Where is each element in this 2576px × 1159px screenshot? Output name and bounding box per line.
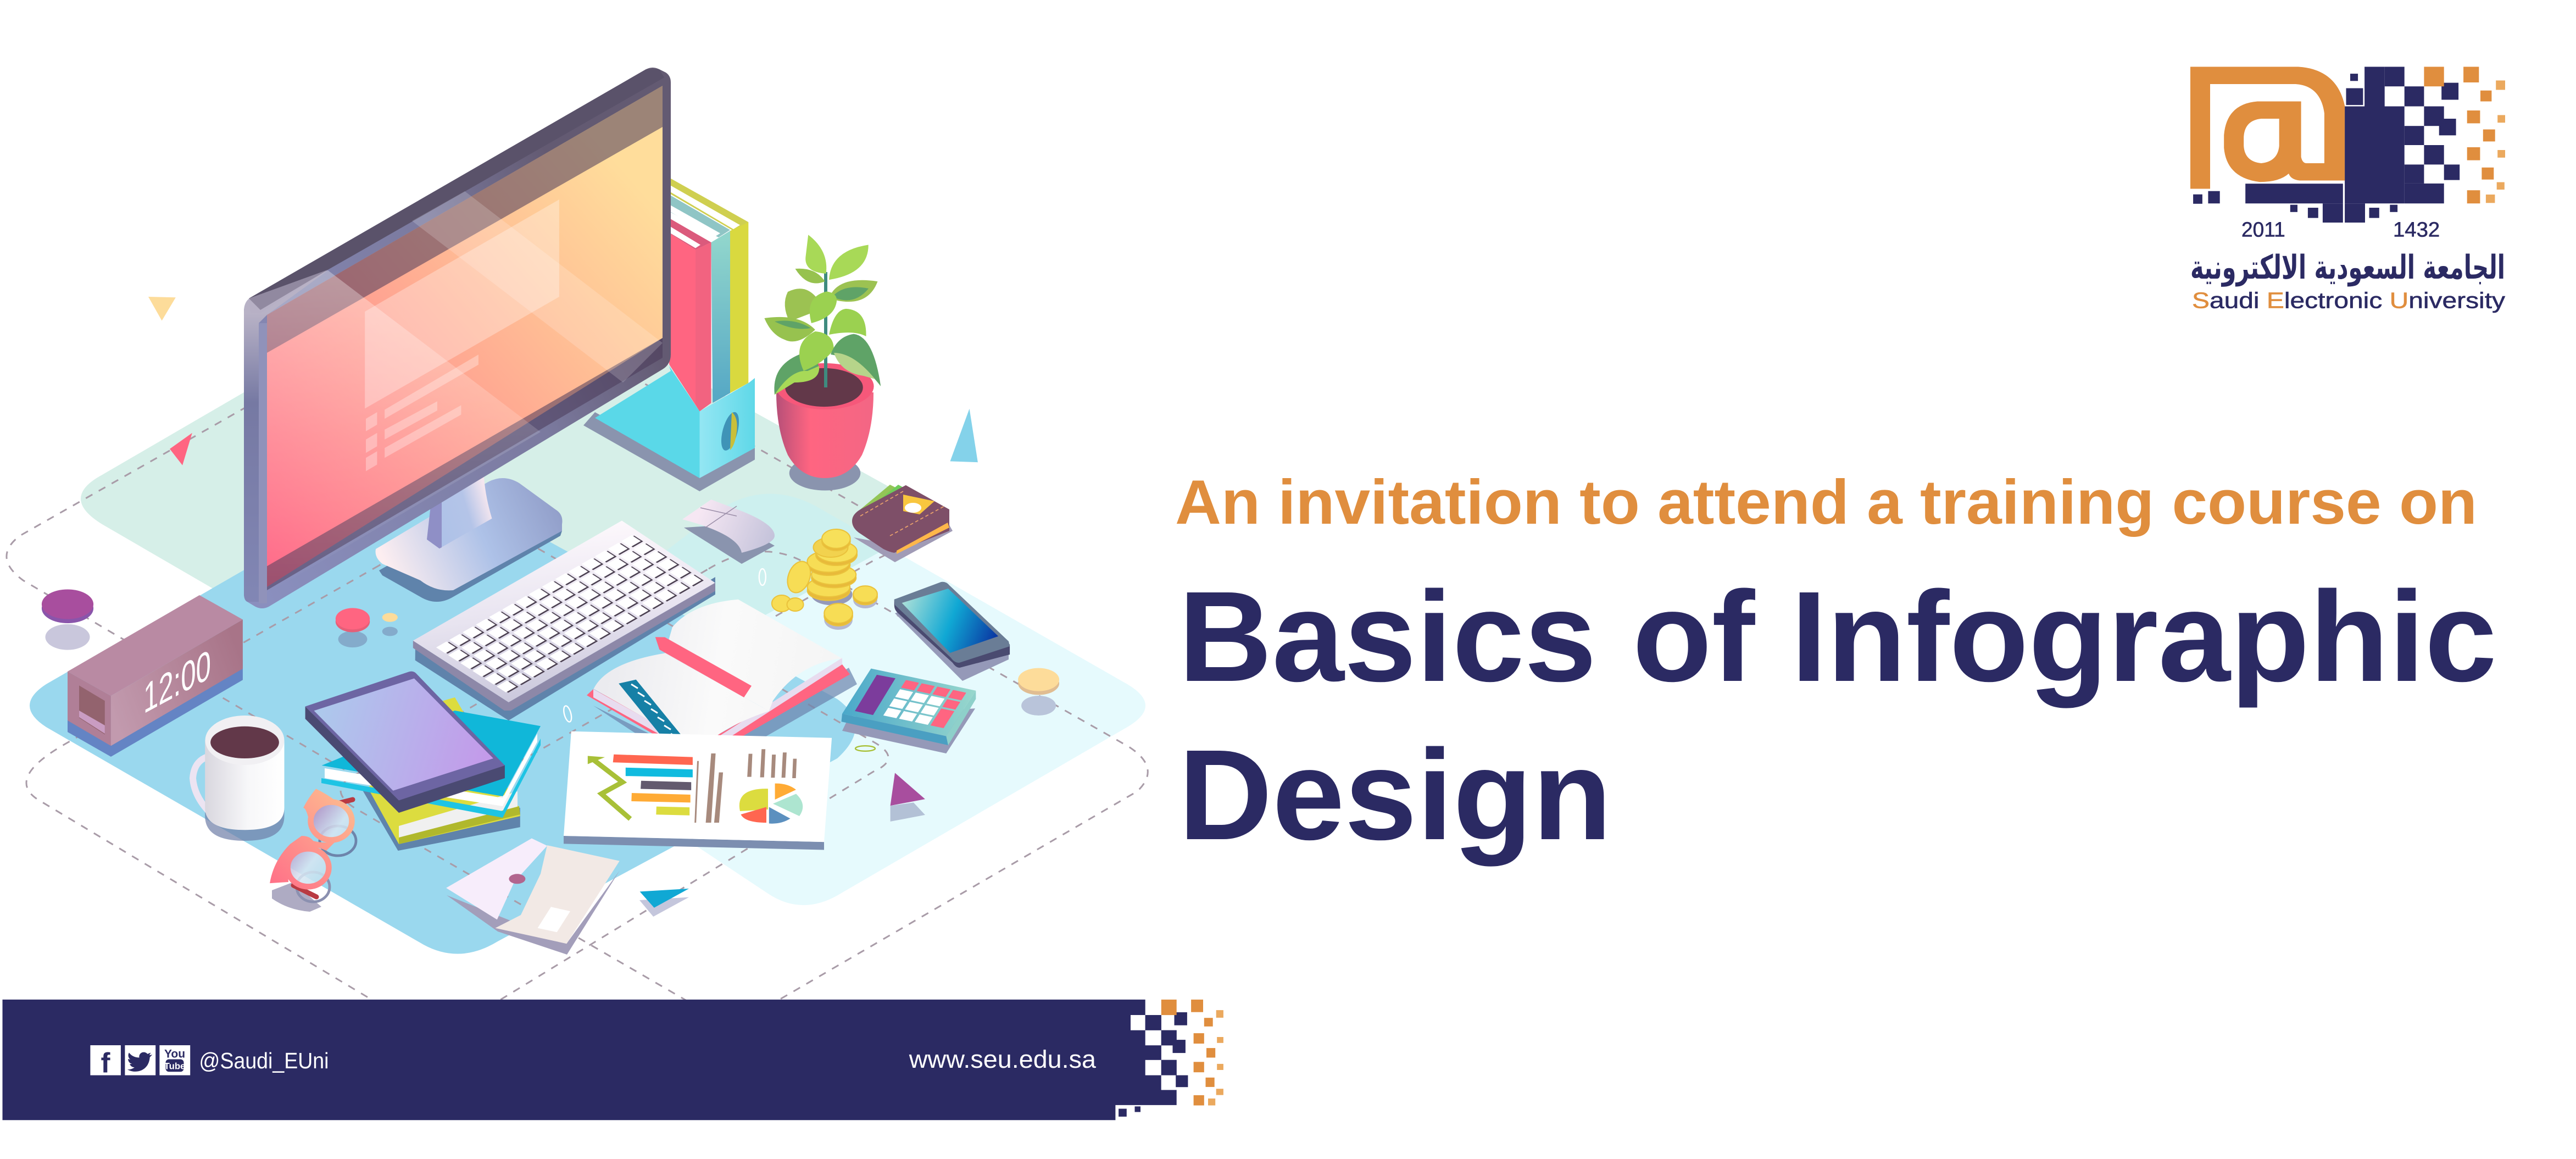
growth arrow	[588, 756, 630, 819]
calculator keys	[883, 680, 966, 728]
horizontal bars	[613, 755, 693, 816]
glasses	[270, 789, 356, 912]
pie chart	[739, 784, 803, 824]
leaves	[764, 235, 881, 395]
icon: youtube	[159, 1045, 190, 1075]
desk mat: mint panel	[81, 266, 923, 758]
mouse	[682, 500, 775, 564]
teal book	[321, 711, 541, 818]
plant in pot	[764, 235, 881, 490]
yellow disc	[1018, 668, 1059, 716]
keys	[434, 534, 704, 694]
screen reflections	[267, 191, 663, 594]
red and yellow discs	[336, 608, 398, 647]
floating triangles	[148, 297, 978, 917]
gold coins	[772, 529, 877, 630]
monitor stand	[376, 470, 563, 602]
logo: orange pixels	[2424, 67, 2495, 203]
desk mat: blue panel	[30, 477, 855, 954]
dashed outlines	[7, 282, 1148, 1039]
footer bar	[2, 1000, 1223, 1120]
smartphone	[894, 582, 1010, 681]
logo: years: 1432	[2393, 219, 2440, 242]
yellow book	[368, 697, 520, 844]
icon: facebook: f	[101, 1047, 111, 1079]
envelopes	[446, 839, 620, 955]
pencil	[655, 637, 752, 697]
vertical bars	[694, 749, 797, 823]
logo: years	[2241, 219, 2440, 242]
ruler	[619, 680, 694, 756]
heading: invitation line: An invitation to attend a training course on	[1175, 468, 2477, 537]
logo: at symbol	[2190, 67, 2345, 189]
calculator	[842, 668, 976, 753]
stack of books and tablet	[305, 672, 541, 851]
wallet	[852, 485, 953, 562]
icon: youtube: You	[164, 1047, 185, 1061]
social handle: @Saudi_EUni	[199, 1048, 329, 1073]
clock time: 12:00	[143, 640, 211, 723]
screen	[267, 86, 663, 587]
desk mat: pale blue panel	[478, 493, 1145, 905]
website url: www.seu.edu.sa	[909, 1045, 1097, 1073]
alarm clock	[68, 595, 243, 757]
paperclips	[563, 569, 875, 751]
monitor	[244, 68, 671, 608]
purple button disc	[42, 589, 93, 650]
teal binder	[669, 195, 730, 403]
icon: facebook	[90, 1045, 121, 1078]
screen document placeholder	[365, 199, 559, 471]
logo: years: 2011	[2241, 219, 2285, 242]
tablet	[305, 672, 505, 813]
logo: light orange pixels	[2486, 80, 2505, 203]
open notebook	[587, 600, 857, 775]
icon: youtube: Tube	[164, 1061, 185, 1072]
logo: navy pixel block	[2193, 67, 2460, 223]
chart paper	[564, 731, 832, 850]
coffee mug	[193, 716, 285, 841]
icon: twitter	[125, 1045, 155, 1075]
title: first line: Basics of Infographic	[1178, 564, 2497, 708]
yellow binder	[669, 178, 748, 393]
footer pixel pattern	[1119, 1000, 1223, 1117]
pink binder	[669, 218, 711, 411]
title: second line: Design	[1178, 723, 1612, 867]
logo: english name: S audi E lectronic U niversity	[2192, 288, 2506, 313]
university logo	[2190, 67, 2506, 313]
keyboard	[413, 520, 715, 720]
folder box with binders	[583, 178, 755, 491]
